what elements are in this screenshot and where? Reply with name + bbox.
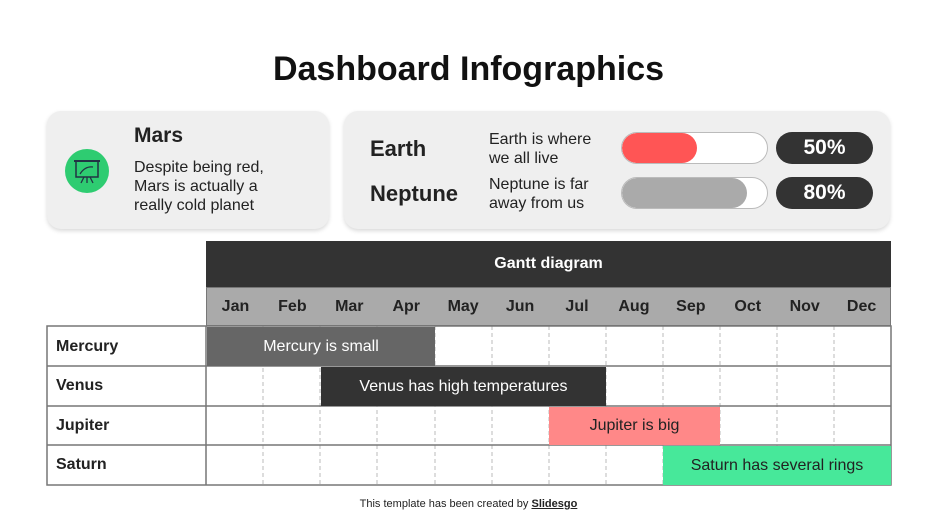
text: mars description: Despite being red, — [134, 159, 264, 176]
footer credit: This template has been created by Slidesgo — [360, 498, 577, 510]
months row: Mar — [335, 298, 364, 315]
pill: 80% — [776, 177, 873, 209]
text: mars description — [134, 159, 264, 214]
panel: progress — [344, 111, 890, 229]
months row: Oct — [734, 298, 761, 315]
months row: Nov — [790, 298, 820, 315]
months row: Aug — [618, 298, 649, 315]
months row: Apr — [392, 298, 420, 315]
bar: venus — [321, 367, 606, 406]
bar: venus: Venus has high temperatures — [359, 378, 568, 394]
text: neptune — [489, 176, 589, 212]
months row — [206, 287, 891, 326]
months row: Feb — [278, 298, 307, 315]
label: earth: Earth — [370, 136, 426, 161]
months row: May — [448, 298, 479, 315]
gantt chart: Saturn — [56, 456, 107, 473]
text: mars description: Mars is actually a — [134, 178, 258, 195]
months row: Jan — [222, 298, 249, 315]
text: earth: Earth is where — [489, 131, 591, 148]
bar: jupiter: Jupiter is big — [590, 417, 679, 434]
months row: Jul — [565, 298, 589, 315]
bar: saturn — [663, 446, 891, 485]
months row: Dec — [847, 298, 876, 315]
pill: 50%: 50% — [803, 136, 846, 159]
title: Dashboard Infographics — [273, 50, 664, 88]
text: earth: we all live — [489, 150, 558, 167]
text: earth — [489, 131, 591, 167]
gantt header: Gantt diagram — [494, 255, 603, 272]
row labels: Mercury — [56, 338, 118, 355]
heading: mars: Mars — [134, 124, 183, 147]
text: neptune: away from us — [489, 195, 584, 212]
pill: 80%: 80% — [803, 181, 846, 204]
gantt chart: Venus — [56, 377, 103, 394]
bar: jupiter — [549, 407, 720, 445]
gantt header — [206, 241, 891, 287]
bar: neptune 80% — [621, 177, 768, 209]
bar: mercury — [207, 327, 435, 366]
pill: 50% — [776, 132, 873, 164]
bar: saturn: Saturn has several rings — [691, 456, 863, 474]
months row: Jun — [506, 298, 534, 315]
bar: earth 50% — [621, 132, 768, 164]
gantt chart: Jupiter — [56, 417, 109, 434]
months row: Sep — [676, 298, 706, 315]
bar: mercury: Mercury is small — [263, 338, 379, 354]
panel: mars — [47, 111, 329, 229]
text: neptune: Neptune is far — [489, 176, 589, 193]
icon: presentation board — [65, 149, 109, 193]
text: mars description: really cold planet — [134, 197, 254, 214]
label: neptune: Neptune — [370, 181, 458, 206]
